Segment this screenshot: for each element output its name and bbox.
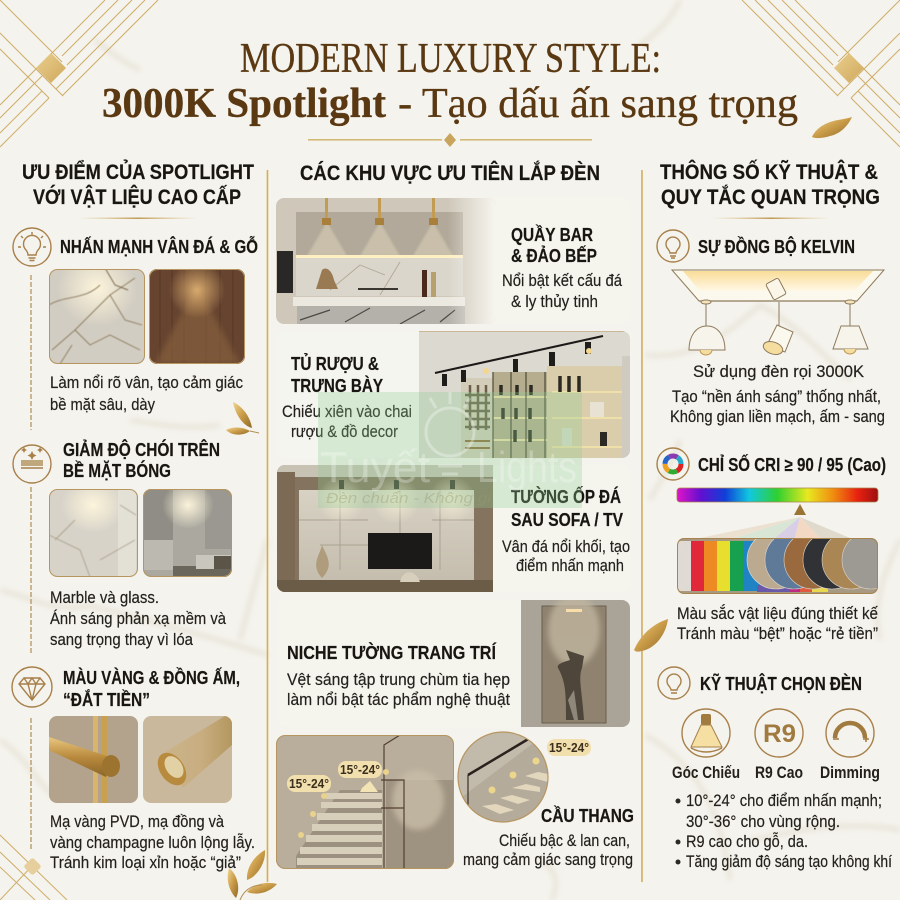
label: & ĐẢO BẾP [511, 245, 597, 266]
photo: walnut wood [149, 262, 245, 364]
title [102, 36, 798, 127]
column heading: specifications [660, 160, 880, 219]
column heading: advantages [22, 160, 254, 219]
watermark: Lights [477, 443, 577, 492]
column divider: right [641, 170, 643, 882]
icon: light bulb [13, 228, 51, 266]
description: Tạo “nền ánh sáng” thống nhất, [672, 388, 881, 406]
photo: glass panels [143, 481, 232, 577]
art deco corner: bottom left [0, 835, 67, 900]
title: - Tạo dấu ấn sang trọng [398, 81, 798, 127]
label: & ly thủy tinh [511, 293, 598, 311]
title: 3000K Spotlight [102, 81, 386, 127]
item: choosing the fixture [658, 667, 892, 871]
icon: dimming [826, 709, 874, 757]
heading: “ĐẮT TIỀN” [63, 689, 150, 710]
photo: stair close-up [458, 732, 548, 822]
description: vàng champagne luôn lộng lẫy. [50, 833, 255, 852]
label: Vệt sáng tập trung chùm tia hẹp [287, 671, 510, 689]
label: làm nổi bật tác phẩm nghệ thuật [287, 691, 510, 709]
dashed connector [30, 275, 32, 430]
label: QUẦY BAR [511, 224, 593, 245]
label [502, 224, 623, 311]
label: Chiếu bậc & lan can, [499, 832, 630, 850]
label: Vân đá nổi khối, tạo [502, 538, 630, 556]
description: Mạ vàng PVD, mạ đồng và [50, 813, 225, 831]
heading: GIẢM ĐỘ CHÓI TRÊN [63, 439, 220, 460]
panel: staircase [276, 732, 634, 869]
description [50, 813, 255, 872]
bullet list [676, 792, 892, 871]
description: Ánh sáng phản xạ mềm và [50, 609, 227, 628]
label [463, 805, 634, 869]
label [287, 642, 510, 709]
icon labels: R9 Cao [755, 764, 803, 782]
art deco corner: top right [742, 0, 900, 147]
description: Tránh kim loại xỉn hoặc “giả” [50, 854, 241, 872]
heading [63, 667, 240, 710]
label: Nổi bật kết cấu đá [502, 272, 623, 290]
description: Làm nổi rõ vân, tạo cảm giác [50, 374, 243, 392]
light beam fan [700, 517, 850, 538]
item: CRI index [657, 448, 900, 643]
label: NICHE TƯỜNG TRANG TRÍ [287, 642, 497, 663]
art deco corner: top left [0, 0, 158, 147]
icon: light bulb [657, 230, 689, 262]
item: reduce glare [13, 439, 232, 655]
photo: niche with sculpture [521, 594, 630, 727]
icon: shiny surface [13, 445, 51, 483]
description: Màu sắc vật liệu đúng thiết kế [677, 604, 878, 623]
title: MODERN LUXURY STYLE: [240, 36, 661, 82]
watermark: Đèn chuẩn - Không gi [326, 490, 492, 507]
photo: living room [277, 465, 493, 592]
description: sang trọng thay vì lóa [50, 631, 194, 649]
photo: polished marble [49, 489, 138, 577]
photo: kitchen [276, 198, 496, 324]
photo: staircase [276, 735, 454, 869]
column heading: specifications: THÔNG SỐ KỸ THUẬT & [660, 160, 878, 184]
icon: gold leaf on divider [634, 619, 668, 652]
icon: gold leaves sprig [228, 850, 277, 900]
item: emphasise stone and wood [13, 228, 258, 430]
photo: wine cabinet [419, 331, 630, 458]
description: Tránh màu “bệt” hoặc “rẻ tiền” [677, 625, 878, 643]
icon: watermark bulb [426, 392, 474, 474]
icon: diamond [12, 667, 52, 707]
bullet list: R9 cao cho gỗ, da. [686, 832, 808, 851]
icon labels: Góc Chiếu [672, 764, 740, 782]
heading: NHẤN MẠNH VÂN ĐÁ & GỖ [60, 236, 258, 257]
icon: colour wheel [657, 448, 689, 480]
label: điểm nhấn mạnh [516, 557, 624, 575]
icon: R9 [755, 709, 803, 757]
label: rượu & đồ decor [291, 423, 398, 441]
bullet list: 30°-36° cho vùng rộng. [686, 813, 840, 831]
heading: KỸ THUẬT CHỌN ĐÈN [700, 673, 862, 694]
description: bề mặt sâu, dày [50, 396, 156, 414]
column heading: priority zones: CÁC KHU VỰC ƯU TIÊN LẮP ĐÈN [300, 161, 600, 185]
label: TỦ RƯỢU & [291, 353, 379, 374]
arrow: spectrum indicator [794, 504, 806, 515]
heading [63, 439, 220, 481]
angle tag: 15°-24° [340, 762, 380, 777]
description [677, 604, 878, 643]
icon: beam angle [682, 709, 730, 757]
description [50, 374, 243, 414]
panel: wine cabinet [276, 331, 630, 458]
label: SAU SOFA / TV [511, 510, 623, 530]
colour spectrum bar [677, 488, 878, 502]
icon: gold leaves [226, 402, 259, 435]
dashed connector [30, 718, 32, 850]
watermark: Tuyết [320, 443, 430, 492]
column heading: advantages: VỚI VẬT LIỆU CAO CẤP [33, 185, 241, 209]
icon: light bulb [658, 667, 690, 699]
icon: R9: R9 [763, 720, 796, 748]
label [282, 353, 412, 441]
photo: marble [49, 269, 145, 364]
heading: MÀU VÀNG & ĐỒNG ẤM, [63, 667, 240, 688]
panel: stone wall behind sofa and TV [277, 465, 630, 592]
photo: brass rod [49, 716, 138, 803]
label [502, 486, 630, 575]
panel: decorative wall niche [277, 594, 630, 727]
watermark [318, 392, 582, 508]
heading: SỰ ĐỒNG BỘ KELVIN [698, 236, 855, 257]
material swatches [677, 538, 878, 594]
heading: BỀ MẶT BÓNG [63, 460, 171, 481]
column heading: advantages: ƯU ĐIỂM CỦA SPOTLIGHT [22, 160, 254, 184]
icon labels: Dimming [820, 764, 880, 782]
label: Chiếu xiên vào chai [282, 403, 412, 421]
icon labels [672, 764, 880, 782]
panel: bar and kitchen island [276, 198, 630, 324]
label: TRƯNG BÀY [291, 375, 383, 396]
photo: champagne spotlight [143, 716, 232, 803]
description [50, 589, 227, 649]
dashed connector [30, 487, 32, 655]
column divider: left [266, 170, 268, 882]
description [670, 363, 885, 426]
bullet list: 10°-24° cho điểm nhấn mạnh; [686, 792, 882, 810]
icon: gold leaf top right [812, 117, 852, 138]
column heading: specifications: QUY TẮC QUAN TRỌNG [661, 185, 880, 209]
description: Sử dụng đèn rọi 3000K [693, 363, 864, 381]
angle tag: 15°-24° [289, 776, 329, 791]
label: mang cảm giác sang trọng [463, 851, 633, 869]
illustration: ceiling with spotlights [672, 270, 884, 357]
item: Kelvin consistency [657, 230, 885, 426]
label: CẦU THANG [541, 805, 634, 826]
title divider [308, 133, 592, 147]
angle tag: 15°-24° [549, 740, 589, 755]
label: TƯỜNG ỐP ĐÁ [511, 486, 621, 507]
item: warm gold and bronze [12, 667, 255, 872]
description: Marble và glass. [50, 589, 159, 607]
